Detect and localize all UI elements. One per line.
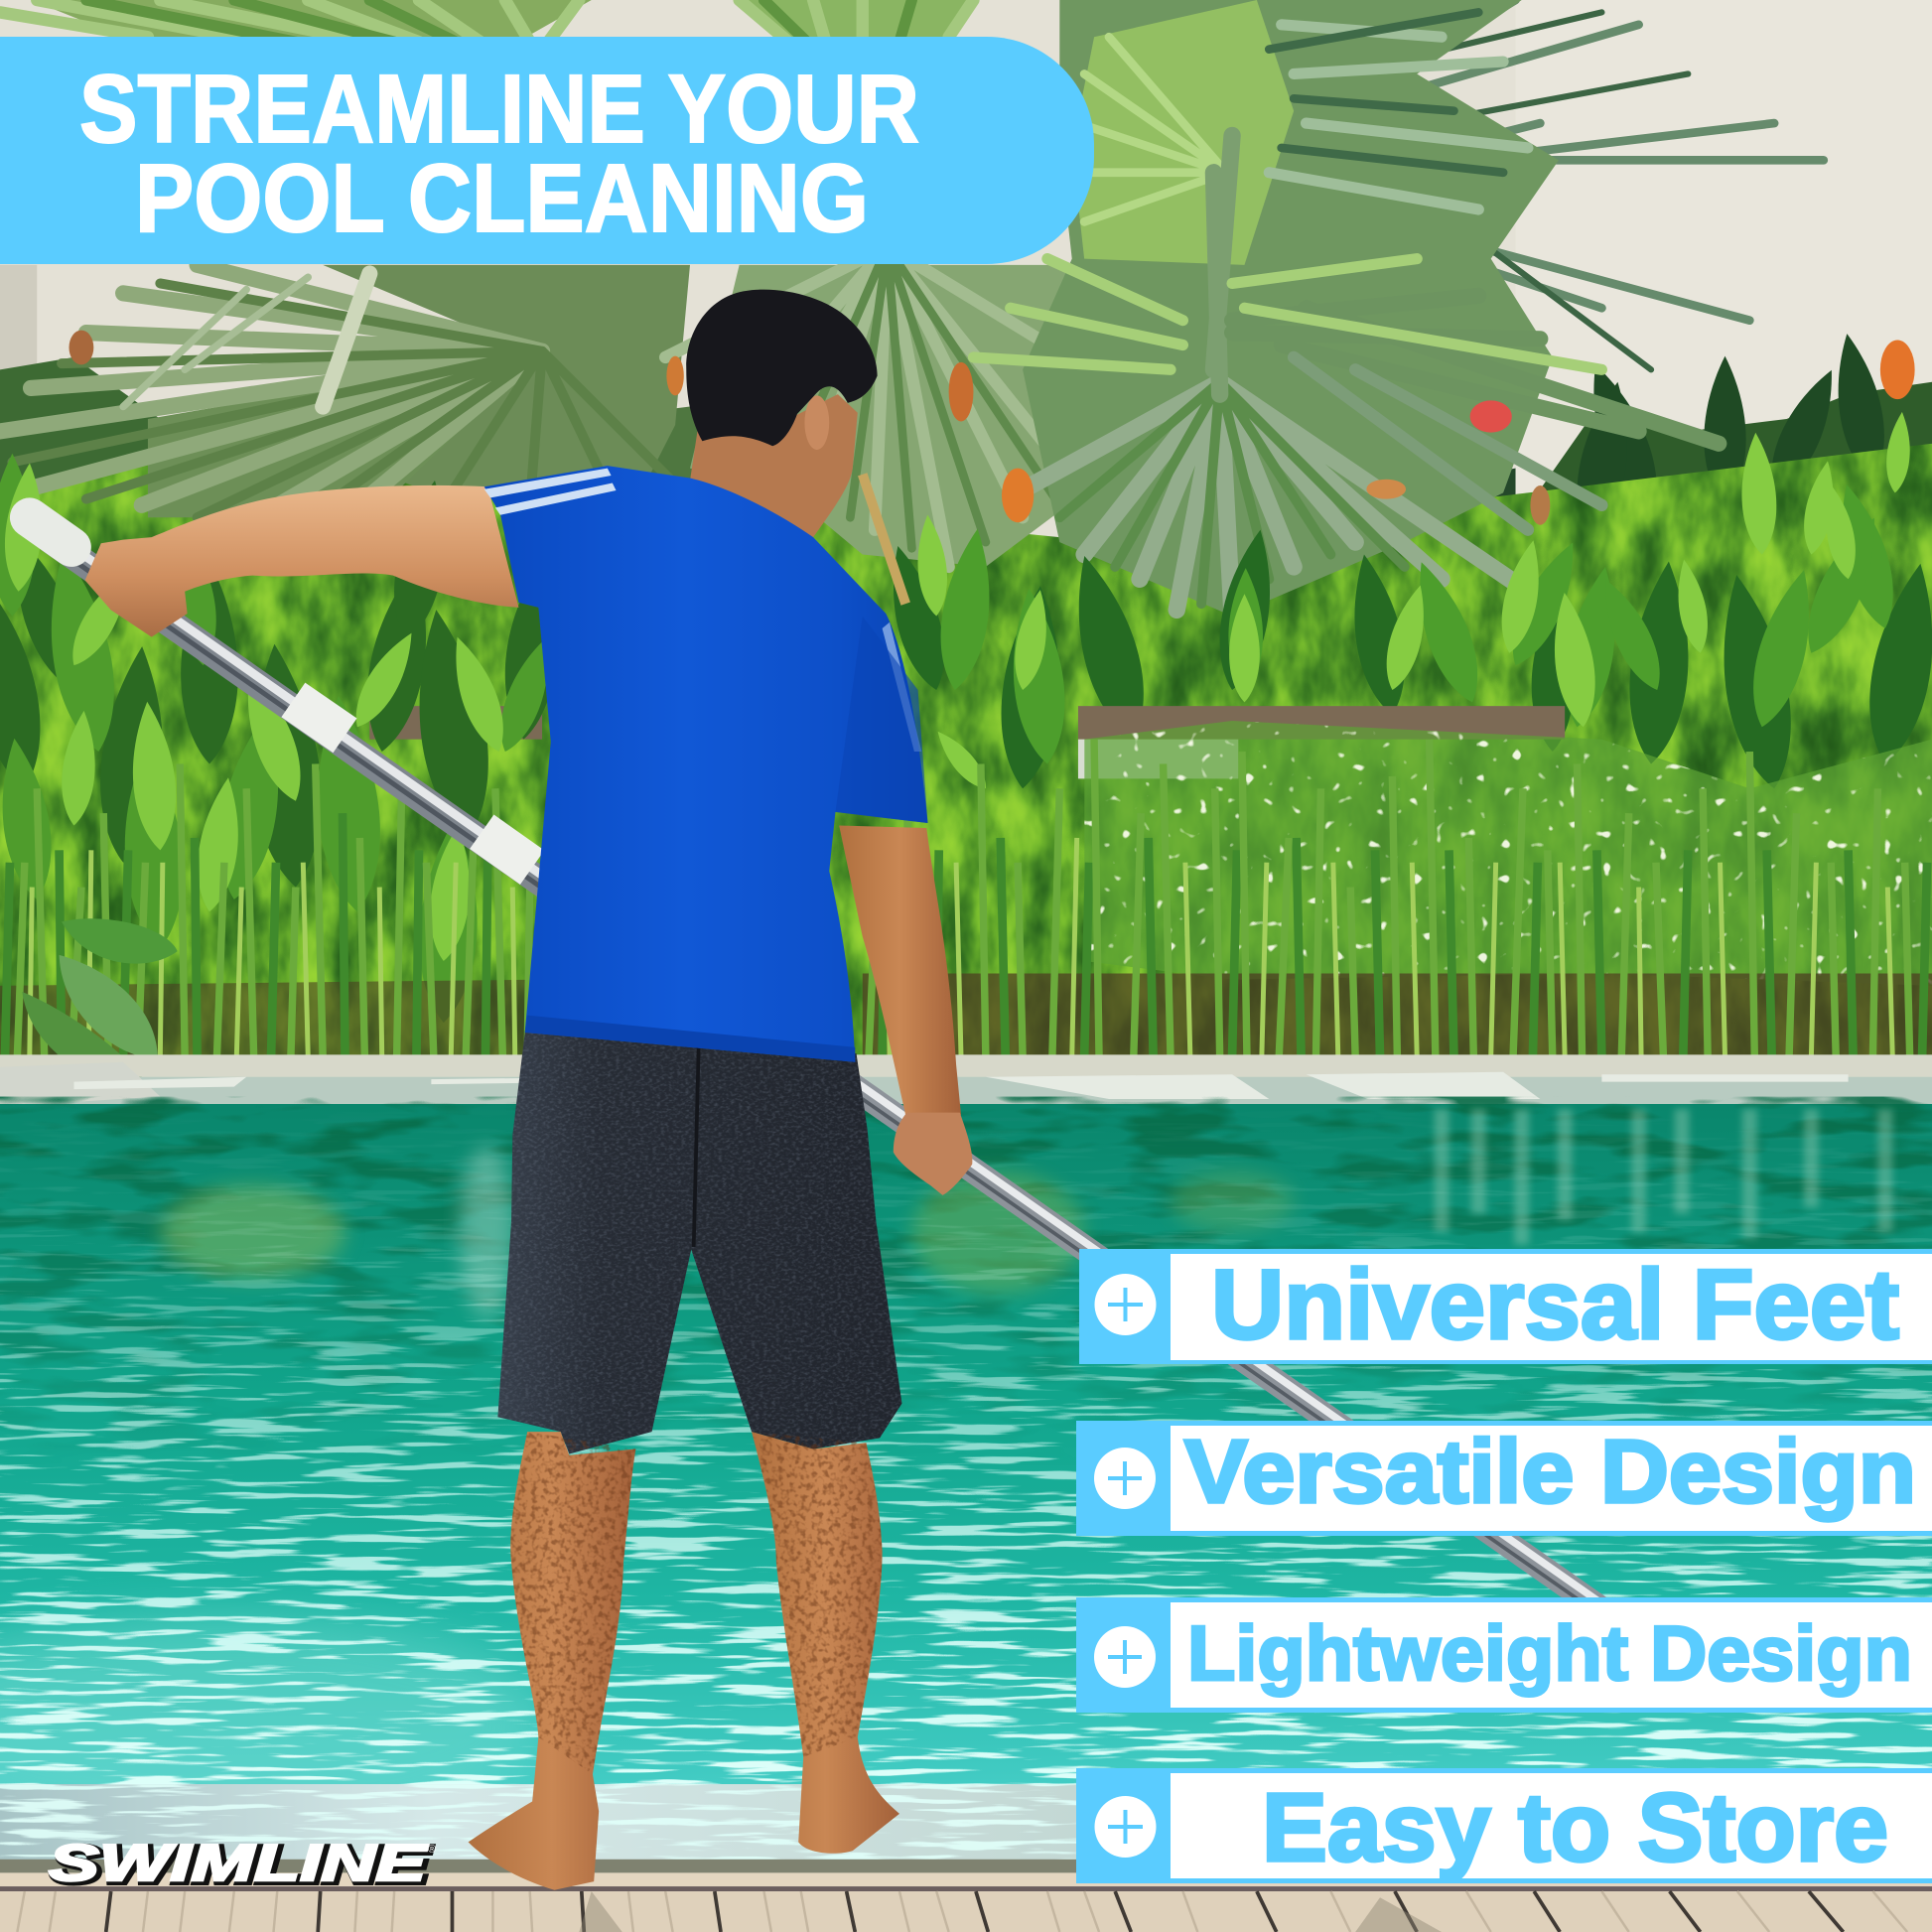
far pool ledge — [0, 1054, 1932, 1106]
telescopic pole: upper section — [30, 517, 552, 890]
left leg and foot — [469, 1432, 635, 1890]
near pool lip and deck — [0, 1860, 1932, 1932]
headline text: POOL CLEANING — [135, 144, 869, 252]
background wall — [0, 0, 1932, 1072]
icon: plus — [1094, 1626, 1156, 1688]
icon: plus — [1094, 1274, 1156, 1335]
brand logo: ® — [428, 1844, 436, 1856]
lower hand on pole — [894, 1113, 972, 1195]
leaves right of person — [878, 411, 1932, 795]
neck and face — [690, 394, 858, 537]
icon: plus — [1094, 1796, 1156, 1858]
pole collar upper — [293, 700, 345, 736]
feature row: Easy to Store — [1076, 1768, 1932, 1883]
headline text — [79, 55, 919, 252]
pole collar lower — [482, 832, 532, 868]
feature row: Lightweight Design — [1076, 1597, 1932, 1713]
dark board shorts — [492, 1018, 911, 1461]
hair — [686, 290, 878, 446]
shallow front pool edge — [0, 1784, 1078, 1861]
fronds on the upper right wall — [1244, 0, 1824, 419]
white flower ground cover — [1084, 702, 1932, 986]
fan palm: left — [0, 265, 690, 523]
soil — [0, 973, 1932, 1057]
pole end cap — [30, 517, 71, 547]
feature row: Lightweight Design: Lightweight Design — [1187, 1609, 1912, 1697]
mid foliage texture — [0, 444, 1932, 1059]
headline banner — [0, 37, 1094, 264]
headline text: STREAMLINE YOUR — [79, 55, 919, 163]
right leg and foot — [752, 1432, 899, 1854]
lower arm — [839, 826, 961, 1115]
orange and red flowers — [69, 331, 1915, 604]
top fronds — [0, 0, 973, 42]
feature row: Versatile Design: Versatile Design — [1184, 1423, 1916, 1522]
blue t-shirt — [484, 466, 928, 1062]
feature row: Easy to Store: Easy to Store — [1262, 1773, 1888, 1881]
wooden planter edge — [1078, 706, 1565, 778]
feature row: Versatile Design — [1076, 1421, 1932, 1536]
brand logo: SWIMLINE — [49, 1835, 428, 1892]
raised arm and hand — [85, 485, 518, 637]
leg hair texture — [510, 1432, 882, 1771]
leaves left of person — [0, 454, 564, 1025]
dark shrubs behind palms — [0, 330, 1932, 740]
brand logo — [49, 1835, 436, 1894]
telescopic pole: lower section — [850, 1078, 1608, 1620]
fan palm: centre behind head — [665, 246, 1109, 567]
brand logo: SWIMLINE — [52, 1837, 431, 1894]
pool water — [0, 1097, 1932, 1836]
green stems — [5, 740, 1927, 1057]
feature row: Universal Feet: Universal Feet — [1211, 1249, 1899, 1359]
icon: plus — [1094, 1448, 1156, 1509]
foreground leaves at pool edge — [22, 918, 178, 1092]
large palm: right centre — [973, 0, 1719, 617]
